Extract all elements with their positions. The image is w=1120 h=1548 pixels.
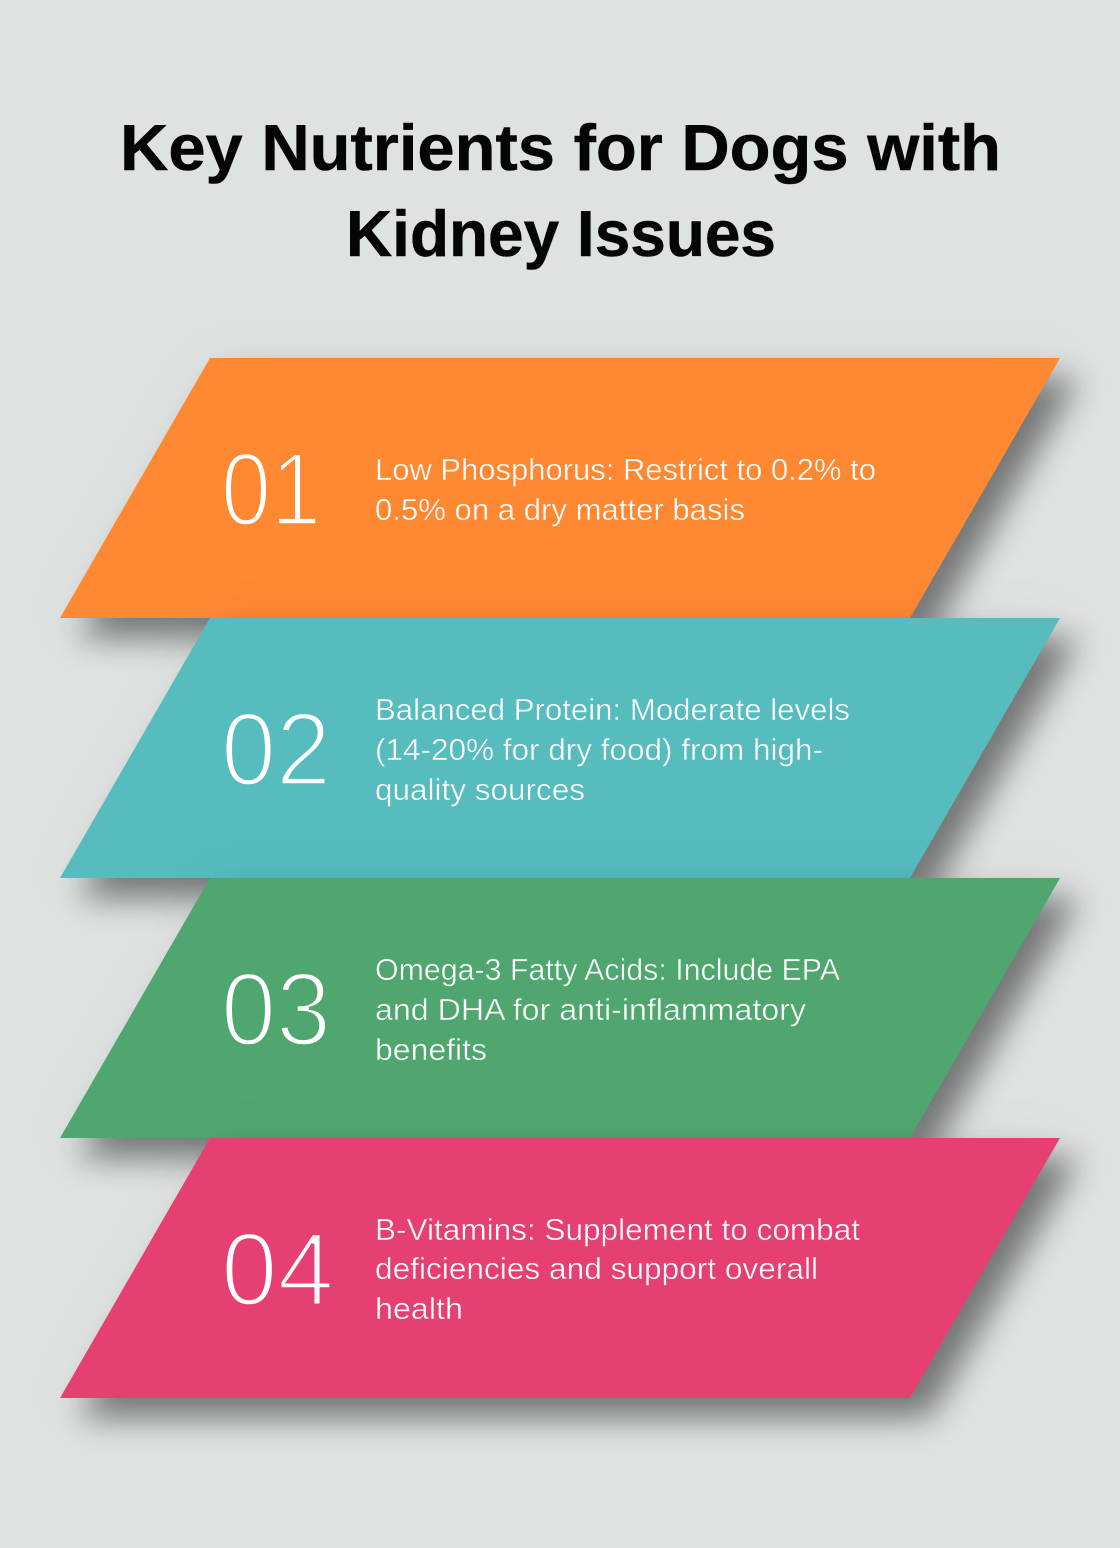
text: low phosphorus description: 0.5% on a dry matter basis	[375, 492, 745, 527]
panel: 03 omega-3 fatty acids	[60, 878, 1060, 1138]
text: b-vitamins description: deficiencies and support overall	[375, 1251, 818, 1286]
text: omega-3 description	[375, 952, 840, 1067]
text: b-vitamins description: B-Vitamins: Supplement to combat	[375, 1212, 860, 1247]
text: omega-3 description: and DHA for anti-inflammatory	[375, 992, 807, 1027]
text: b-vitamins description	[375, 1212, 860, 1326]
panel: 03 omega-3 fatty acids: 03	[221, 952, 331, 1068]
panel: 01 low phosphorus	[60, 358, 1060, 618]
title: Kidney Issues	[346, 197, 776, 270]
panel: 01 low phosphorus: 01	[221, 432, 321, 548]
panel: 04 b-vitamins: 04	[221, 1212, 334, 1328]
text: omega-3 description: benefits	[375, 1032, 487, 1067]
text: balanced protein description: (14-20% for dry food) from high-	[375, 732, 823, 767]
text: low phosphorus description: Low Phosphorus: Restrict to 0.2% to	[375, 452, 876, 487]
title	[120, 111, 1001, 270]
text: balanced protein description	[375, 692, 850, 807]
panel: 04 b-vitamins	[60, 1138, 1060, 1398]
panel: 02 balanced protein: 02	[221, 692, 331, 808]
text: b-vitamins description: health	[375, 1291, 463, 1326]
text: balanced protein description: Balanced Protein: Moderate levels	[375, 692, 850, 727]
text: low phosphorus description	[375, 452, 876, 527]
text: balanced protein description: quality sources	[375, 772, 585, 807]
panel: 02 balanced protein	[60, 618, 1060, 878]
title: Key Nutrients for Dogs with	[120, 111, 1001, 184]
text: omega-3 description: Omega-3 Fatty Acids: Include EPA	[375, 952, 840, 987]
